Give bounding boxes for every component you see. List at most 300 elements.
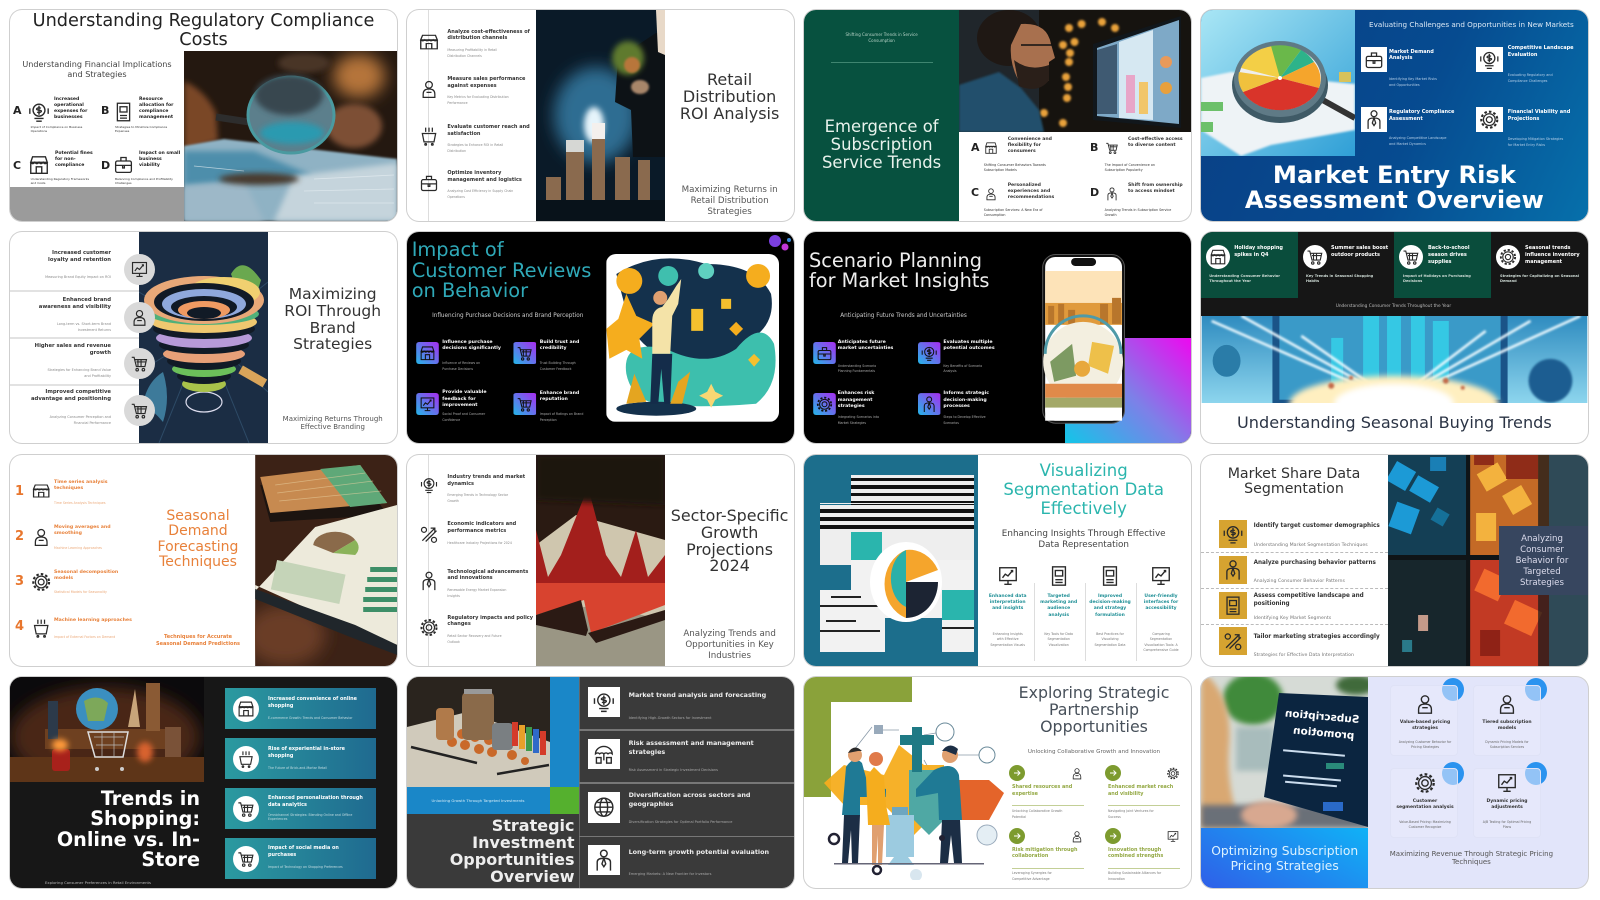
bullet 1 — [1009, 765, 1025, 781]
row 3 detail: Diversification Strategies for Optimal Portfolio Performance — [629, 820, 732, 824]
item 2 detail: Trust Building Through — [540, 361, 576, 365]
row 3 heading: Assess competitive landscape and — [1254, 593, 1364, 599]
item 1 heading: Anticipates future — [838, 340, 886, 345]
photo: woman viewing subscription promotion on tablet — [1201, 677, 1368, 828]
item 2 heading — [447, 76, 526, 89]
column 3 heading — [1089, 594, 1131, 619]
card 1 icon — [233, 696, 259, 722]
item C heading: for non- — [55, 157, 76, 162]
row 3 heading — [1254, 592, 1364, 608]
subtitle: Anticipating Future Trends and Uncertainties — [840, 313, 967, 319]
tile 3 heading: segmentation analysis — [1396, 805, 1454, 810]
side band — [1549, 455, 1588, 666]
item 4 detail: Scenarios — [943, 421, 959, 425]
card 3 heading: Enhanced personalization through — [268, 795, 363, 801]
column 3 detail — [1094, 632, 1126, 648]
icon circle 3 — [1399, 245, 1423, 269]
illustration: reaching for stars — [606, 254, 779, 422]
subtitle: Maximizing Returns in — [682, 184, 778, 194]
column 4 detail: Visualization Tools: A — [1144, 643, 1178, 647]
item A detail: Subscription Models — [984, 168, 1017, 172]
subtitle — [1002, 529, 1166, 551]
item 4 detail — [1500, 274, 1579, 284]
letter B: B — [1090, 141, 1098, 154]
item 2 detail — [1508, 72, 1553, 84]
tile 1 heading: strategies — [1412, 726, 1438, 731]
item 1 heading — [48, 250, 111, 265]
icon: cart — [1106, 142, 1118, 154]
panel: Market Share Data Segmentation — [1201, 455, 1588, 666]
item 2 detail — [1306, 274, 1373, 284]
icon tile 2 — [918, 342, 941, 364]
title: Investment — [472, 833, 574, 852]
card 4 heading: Impact of social media on — [268, 845, 339, 851]
icon: economic indicators — [418, 524, 440, 544]
item 2 heading: Summer sales boost — [1331, 245, 1388, 251]
item 1 heading: Analyze cost-effectiveness of — [447, 29, 530, 35]
item B detail: Strategies to Minimize Compliance — [115, 125, 167, 129]
item 3 detail: Impact of Holidays on Purchasing — [1403, 274, 1471, 278]
column 3 detail: Best Practices for — [1096, 632, 1124, 636]
item 4 heading: Innovation through — [1108, 847, 1161, 853]
row 2 detail: Analyzing Consumer Behavior Patterns — [1254, 579, 1345, 584]
icon: small business — [114, 156, 132, 173]
item 3 detail: Renewable Energy Market Expansion — [447, 588, 506, 592]
column 2 detail — [1044, 632, 1073, 648]
item 2 heading: and visibility — [1108, 791, 1144, 797]
accent dot 2 — [1525, 678, 1547, 701]
column 4 detail — [1143, 632, 1179, 654]
title: Maximizing — [289, 285, 377, 303]
title: Subscription — [831, 135, 933, 154]
title — [57, 789, 200, 870]
icon: risk mitigation — [1069, 830, 1085, 843]
title: Exploring Strategic — [1019, 683, 1169, 702]
item 2 detail: Healthcare Industry Projections for 2024 — [447, 541, 512, 545]
subtitle: Understanding Financial Implications — [22, 59, 172, 69]
title: Assessment Overview — [1245, 186, 1544, 214]
tile 1 — [1390, 685, 1458, 756]
item 1 detail: Understanding Scenario — [838, 364, 876, 368]
subtitle: and Strategies — [67, 69, 127, 79]
title: Distribution — [683, 87, 776, 106]
item 2 detail: Navigating Joint Ventures for — [1108, 809, 1154, 813]
callout text: Analyzing — [1521, 534, 1563, 544]
item 3 heading: and innovations — [447, 575, 493, 581]
column 3 detail: Visualizing — [1101, 637, 1118, 641]
caption: Understanding Consumer Trends Throughout the Year — [1336, 304, 1451, 309]
title: ROI Analysis — [680, 104, 779, 123]
item 4 detail: Perception — [540, 418, 557, 422]
item 3 heading: models — [54, 576, 73, 581]
item 3 heading: supplies — [1428, 259, 1452, 265]
icon circle 2 — [1303, 245, 1327, 269]
item D heading: viability — [139, 163, 160, 168]
photo: open report and pie chart on desk — [255, 455, 397, 666]
item 1 heading: techniques — [54, 486, 83, 491]
item 1 heading: market uncertainties — [838, 346, 893, 351]
title — [809, 251, 989, 291]
item 1 detail: Purchase Decisions — [442, 367, 473, 371]
tile 4 heading — [1486, 799, 1528, 811]
icon: sales performance — [422, 80, 436, 98]
panel: Strategic Investment Opportunities Overview — [407, 677, 794, 888]
callout box — [1499, 526, 1588, 595]
item C detail: Subscription Services: A New Era of — [984, 208, 1043, 212]
white inset — [831, 702, 1001, 888]
item 1 detail: Identifying Key Market Risks — [1389, 77, 1437, 81]
icon circle 1 — [1206, 245, 1230, 269]
column 1 detail: with Effective — [997, 637, 1019, 641]
item B detail — [115, 125, 168, 133]
title: Customer Reviews — [412, 258, 591, 282]
callout text: Behavior for — [1516, 556, 1568, 566]
blue band — [407, 787, 550, 814]
item 1 heading: loyalty and retention — [48, 257, 111, 263]
title: Understanding Regulatory Compliance — [33, 10, 374, 30]
item 3 detail: and Profitability — [84, 374, 111, 378]
row divider 2 — [579, 782, 794, 784]
item 3 detail — [1403, 274, 1471, 284]
bullet 2 — [1105, 765, 1121, 781]
item 1 detail: Growth — [447, 499, 459, 503]
item 3 detail: Market Strategies — [838, 421, 866, 425]
tile 2 detail — [1485, 740, 1529, 750]
icon: inventory — [420, 176, 438, 192]
item C detail — [30, 177, 89, 185]
decorative rule — [831, 62, 933, 63]
title — [158, 509, 238, 570]
column 2 heading: Targeted — [1047, 594, 1070, 599]
item 3 heading: improvement — [442, 403, 478, 408]
subtitle: Effective Branding — [300, 423, 365, 431]
item 4 heading — [943, 391, 989, 410]
item A detail — [30, 125, 82, 133]
panel: Impact of Customer Reviews on Behavior — [407, 232, 794, 443]
row 4 detail: Strategies for Effective Data Interpretation — [1254, 652, 1354, 658]
title: Understanding Seasonal Buying Trends — [1237, 413, 1552, 432]
title: on Behavior — [412, 279, 528, 302]
tile 2 icon — [1496, 693, 1518, 715]
card 2 heading: shopping — [268, 753, 293, 759]
band caption: Unlocking Growth Through Targeted Investments — [431, 798, 525, 803]
title: Overview — [490, 867, 574, 886]
item D detail — [115, 177, 173, 185]
item 1 heading — [447, 29, 530, 41]
letter C: C — [971, 186, 979, 199]
title: Impact of — [412, 238, 504, 261]
item 2 detail: Analysis — [943, 369, 957, 373]
item C detail: Understanding Regulatory Frameworks — [31, 177, 89, 181]
title: Store — [141, 848, 200, 871]
vertical rule — [579, 677, 580, 888]
panel: Maximizing ROI Through Brand Strategies — [10, 232, 397, 443]
row 2 detail: Risk Assessment in Strategic Investment Decisions — [629, 768, 718, 772]
item 3 detail: Analyzing Competitive Landscape — [1389, 136, 1447, 140]
tile 3 detail: Customer Recognize — [1409, 824, 1441, 828]
item 3 detail: Distribution — [447, 149, 466, 153]
icon: user-friendly interface — [1149, 565, 1173, 587]
green side panel — [804, 10, 959, 221]
item 3 detail — [1389, 135, 1447, 147]
item 2 heading: credibility — [540, 346, 567, 351]
title — [1019, 684, 1169, 735]
icon: personalization — [986, 188, 996, 200]
item 2 detail: Performance — [447, 101, 468, 105]
title — [412, 240, 591, 302]
card 2 detail: The Future of Brick-and-Mortar Retail — [268, 766, 327, 770]
item 4 heading: Enhance brand — [540, 391, 579, 396]
card 2 heading — [268, 746, 345, 759]
item 3 heading — [1428, 245, 1470, 265]
column divider 1 — [1034, 583, 1035, 661]
item B heading: Resource — [139, 97, 163, 102]
item 4 heading: Regulatory impacts and policy — [447, 615, 533, 621]
icon tile 4 — [513, 393, 536, 415]
icon: access mindset — [1104, 187, 1120, 201]
item 1 heading: Shared resources and — [1012, 784, 1072, 790]
tile 4 — [1472, 768, 1541, 838]
title: Shopping: — [90, 807, 200, 830]
item 1 detail: Understanding Consumer Behavior — [1209, 274, 1280, 278]
subtitle: Maximizing Returns Through — [283, 415, 383, 423]
item 4 heading — [1108, 847, 1163, 860]
item 4 detail: Strategies for Capitalizing on Seasonal — [1500, 274, 1579, 278]
callout text: Targeted — [1523, 566, 1561, 576]
item 3 heading: Provide valuable — [442, 390, 487, 395]
caption: Maximizing Revenue Through Strategic Pricing — [1390, 850, 1553, 858]
icon: decomposition — [31, 572, 51, 592]
item 4 detail: Impact of Ratings on Brand — [540, 412, 583, 416]
item 3 detail — [447, 587, 506, 600]
image: bursting bar chart — [1201, 316, 1588, 403]
icon: time series — [31, 483, 51, 499]
item 3 heading — [447, 569, 528, 582]
card 2 — [224, 738, 376, 779]
item 3 heading: Technological advancements — [447, 569, 528, 575]
subtitle — [683, 629, 776, 662]
photo: woman viewing subscription promotion on tablet: promotion — [1293, 725, 1355, 742]
item 1 heading — [447, 474, 525, 487]
row divider 1 — [1201, 552, 1388, 553]
subtitle: Seasonal Demand Predictions — [156, 641, 240, 647]
caption — [1390, 850, 1553, 867]
title: Forecasting — [158, 539, 238, 555]
item 4 heading: Financial Viability and — [1508, 109, 1570, 115]
icon circle 4 — [1496, 245, 1520, 269]
green column 1 — [1201, 232, 1298, 298]
item 3 heading — [442, 390, 487, 409]
item 4 detail: Steps to Develop Effective — [943, 415, 986, 419]
column 1 heading: Enhanced data — [989, 594, 1027, 599]
item 3 heading: growth — [90, 350, 111, 356]
item D detail: Growth — [1105, 212, 1117, 216]
title: Costs — [179, 30, 228, 50]
item 2 heading: against expenses — [447, 83, 497, 89]
item 2 heading — [39, 296, 111, 311]
row divider 1 — [10, 290, 139, 292]
item 4 heading: advantage and positioning — [31, 396, 111, 402]
item 1 detail — [447, 492, 508, 504]
item 2 heading — [943, 340, 995, 352]
item 4 detail — [540, 412, 583, 424]
item 1 detail — [1209, 274, 1280, 284]
card 4 heading: purchases — [268, 852, 296, 858]
item A heading: flexibility for — [1008, 143, 1041, 148]
item 4 heading: reputation — [540, 397, 568, 402]
item C detail — [984, 208, 1043, 218]
letter D: D — [1090, 186, 1099, 199]
item D heading — [139, 150, 180, 168]
item C heading: recommendations — [1008, 195, 1054, 200]
subtitle: Industries — [708, 651, 751, 661]
column 2 heading — [1040, 594, 1077, 619]
tile 1 detail: Pricing Strategies — [1411, 745, 1439, 749]
icon: expenses — [29, 104, 49, 122]
column 4 detail: Segmentation — [1150, 637, 1172, 641]
icon: customer reach — [422, 128, 436, 146]
number 1: 1 — [15, 484, 24, 499]
item 1 detail: Measuring Profitability in Retail — [447, 48, 497, 52]
item 4 detail: Innovation — [1108, 877, 1125, 881]
item 1 heading: decisions significantly — [442, 346, 501, 351]
icon circle 2 — [124, 302, 154, 332]
item 4 detail — [1508, 136, 1563, 148]
column 2 detail: Segmentation — [1047, 637, 1070, 641]
item 4 heading — [31, 388, 111, 403]
item 4 detail: Outlook — [447, 640, 460, 644]
title — [1245, 162, 1544, 212]
title: Retail — [707, 70, 752, 89]
title: Opportunities — [450, 850, 574, 869]
icon tile 3 — [813, 393, 836, 415]
subtitle: Opportunities in Key — [685, 640, 774, 650]
item 4 heading: Machine learning approaches — [54, 618, 132, 623]
item 3 heading: Seasonal decomposition — [54, 570, 118, 575]
item 2 heading — [447, 521, 516, 535]
card 3 icon — [233, 796, 259, 822]
item 3 detail — [447, 143, 503, 153]
title: Strategies — [293, 335, 372, 353]
item 2 detail: Success — [1108, 815, 1121, 819]
row divider 3 — [1201, 624, 1388, 625]
item C detail: and Costs — [31, 181, 45, 185]
title: Brand — [310, 319, 356, 337]
item 4 heading: Informs strategic — [943, 391, 989, 396]
title: Optimizing Subscription — [1211, 844, 1358, 858]
photo: magnifier on risk gauge — [1201, 10, 1355, 156]
blue column — [550, 677, 579, 787]
subtitle: Techniques for Accurate — [164, 634, 232, 640]
item 3 heading: season drives — [1428, 252, 1467, 258]
item 4 heading: Improved competitive — [45, 388, 111, 394]
icon: distribution channels — [420, 34, 438, 50]
item B detail: The Impact of Convenience on — [1105, 163, 1155, 167]
photo: woman viewing subscription promotion on tablet: Subscription — [1284, 708, 1360, 726]
callout text — [1516, 534, 1568, 588]
row divider 1 — [579, 729, 794, 730]
title block — [1201, 828, 1368, 888]
item 4 detail: Impact of External Factors on Demand — [54, 635, 115, 639]
timeline rule — [428, 455, 429, 666]
item 4 heading: processes — [943, 404, 970, 409]
item A detail: Impact of Compliance on Business — [31, 125, 82, 129]
row 3 icon — [588, 792, 620, 823]
column 4 detail: Comprehensive Guide — [1143, 648, 1179, 652]
item 1 detail: Potential — [1012, 815, 1026, 819]
icon: shared resources — [1069, 767, 1085, 780]
item 4 heading — [540, 391, 579, 403]
item 3 heading: satisfaction — [447, 131, 480, 137]
item 2 heading — [540, 340, 579, 352]
icon tile 1 — [416, 342, 439, 364]
card 4 heading — [268, 845, 339, 858]
item 2 heading — [1508, 45, 1574, 59]
number 3: 3 — [15, 574, 24, 589]
icon box: competitive landscape — [1476, 47, 1503, 72]
item 2 heading: Economic indicators and — [447, 521, 516, 527]
item D heading: Shift from ownership — [1128, 183, 1183, 188]
title: Segmentation — [1244, 481, 1344, 497]
subtitle: Enhancing Insights Through Effective — [1002, 529, 1166, 539]
green block — [550, 787, 579, 814]
item 1 heading: Analysis — [1389, 55, 1412, 61]
item 2 detail: Investment Returns — [78, 328, 111, 332]
row 4 detail: Emerging Markets: A New Frontier for Investors — [629, 872, 711, 876]
title: Opportunities — [1040, 717, 1148, 736]
footnote: Exploring Consumer Preferences in Retail Environments — [45, 880, 151, 885]
title — [284, 286, 381, 353]
item A heading: Increased — [54, 97, 79, 102]
tile 2 heading: models — [1498, 726, 1516, 731]
card 4 — [224, 838, 376, 879]
item D heading: to access mindset — [1128, 189, 1175, 194]
item 3 detail — [48, 367, 111, 380]
illustration: striped documents and pie chart — [804, 455, 978, 666]
title — [450, 818, 574, 885]
photo: man viewing dashboard at night — [959, 10, 1191, 132]
item 2 heading — [1108, 784, 1173, 798]
item 1 detail: Throughout the Year — [1209, 279, 1251, 283]
green column 3 — [1394, 232, 1491, 298]
item 4 detail — [943, 415, 986, 426]
accent dot 1 — [1442, 678, 1464, 701]
item 4 detail: Retail Sector Recovery and Future — [447, 634, 502, 638]
item C heading: compliance — [55, 163, 84, 168]
item A heading: businesses — [54, 115, 83, 120]
item 4 heading — [447, 615, 533, 628]
item 3 heading — [1012, 847, 1078, 860]
icon tile 4 — [918, 393, 941, 415]
item 3 heading: Regulatory Compliance — [1389, 109, 1454, 115]
item 4 heading — [1508, 109, 1570, 123]
bullet 3 — [1009, 828, 1025, 844]
title: Strategic — [492, 816, 574, 835]
panel: Sector-Specific Growth Projections 2024 — [407, 455, 794, 666]
row 4 heading: Tailor marketing strategies accordingly — [1254, 634, 1380, 640]
item 2 detail: Machine Learning Approaches — [54, 546, 102, 550]
tile 1 detail: Analyzing Customer Behavior for — [1399, 740, 1451, 744]
phone mockup — [1042, 254, 1125, 424]
row divider 2 — [10, 337, 139, 339]
tile 2 heading: Tiered subscription — [1482, 720, 1532, 725]
image: radial blocks in blue, orange, red — [1388, 455, 1549, 666]
title: Service Trends — [822, 153, 941, 172]
card 3 detail — [268, 812, 352, 821]
item C heading: Potential fines — [55, 151, 93, 156]
illustration: business partners shaking hands — [824, 705, 1009, 880]
row 3 heading: geographies — [629, 800, 673, 808]
